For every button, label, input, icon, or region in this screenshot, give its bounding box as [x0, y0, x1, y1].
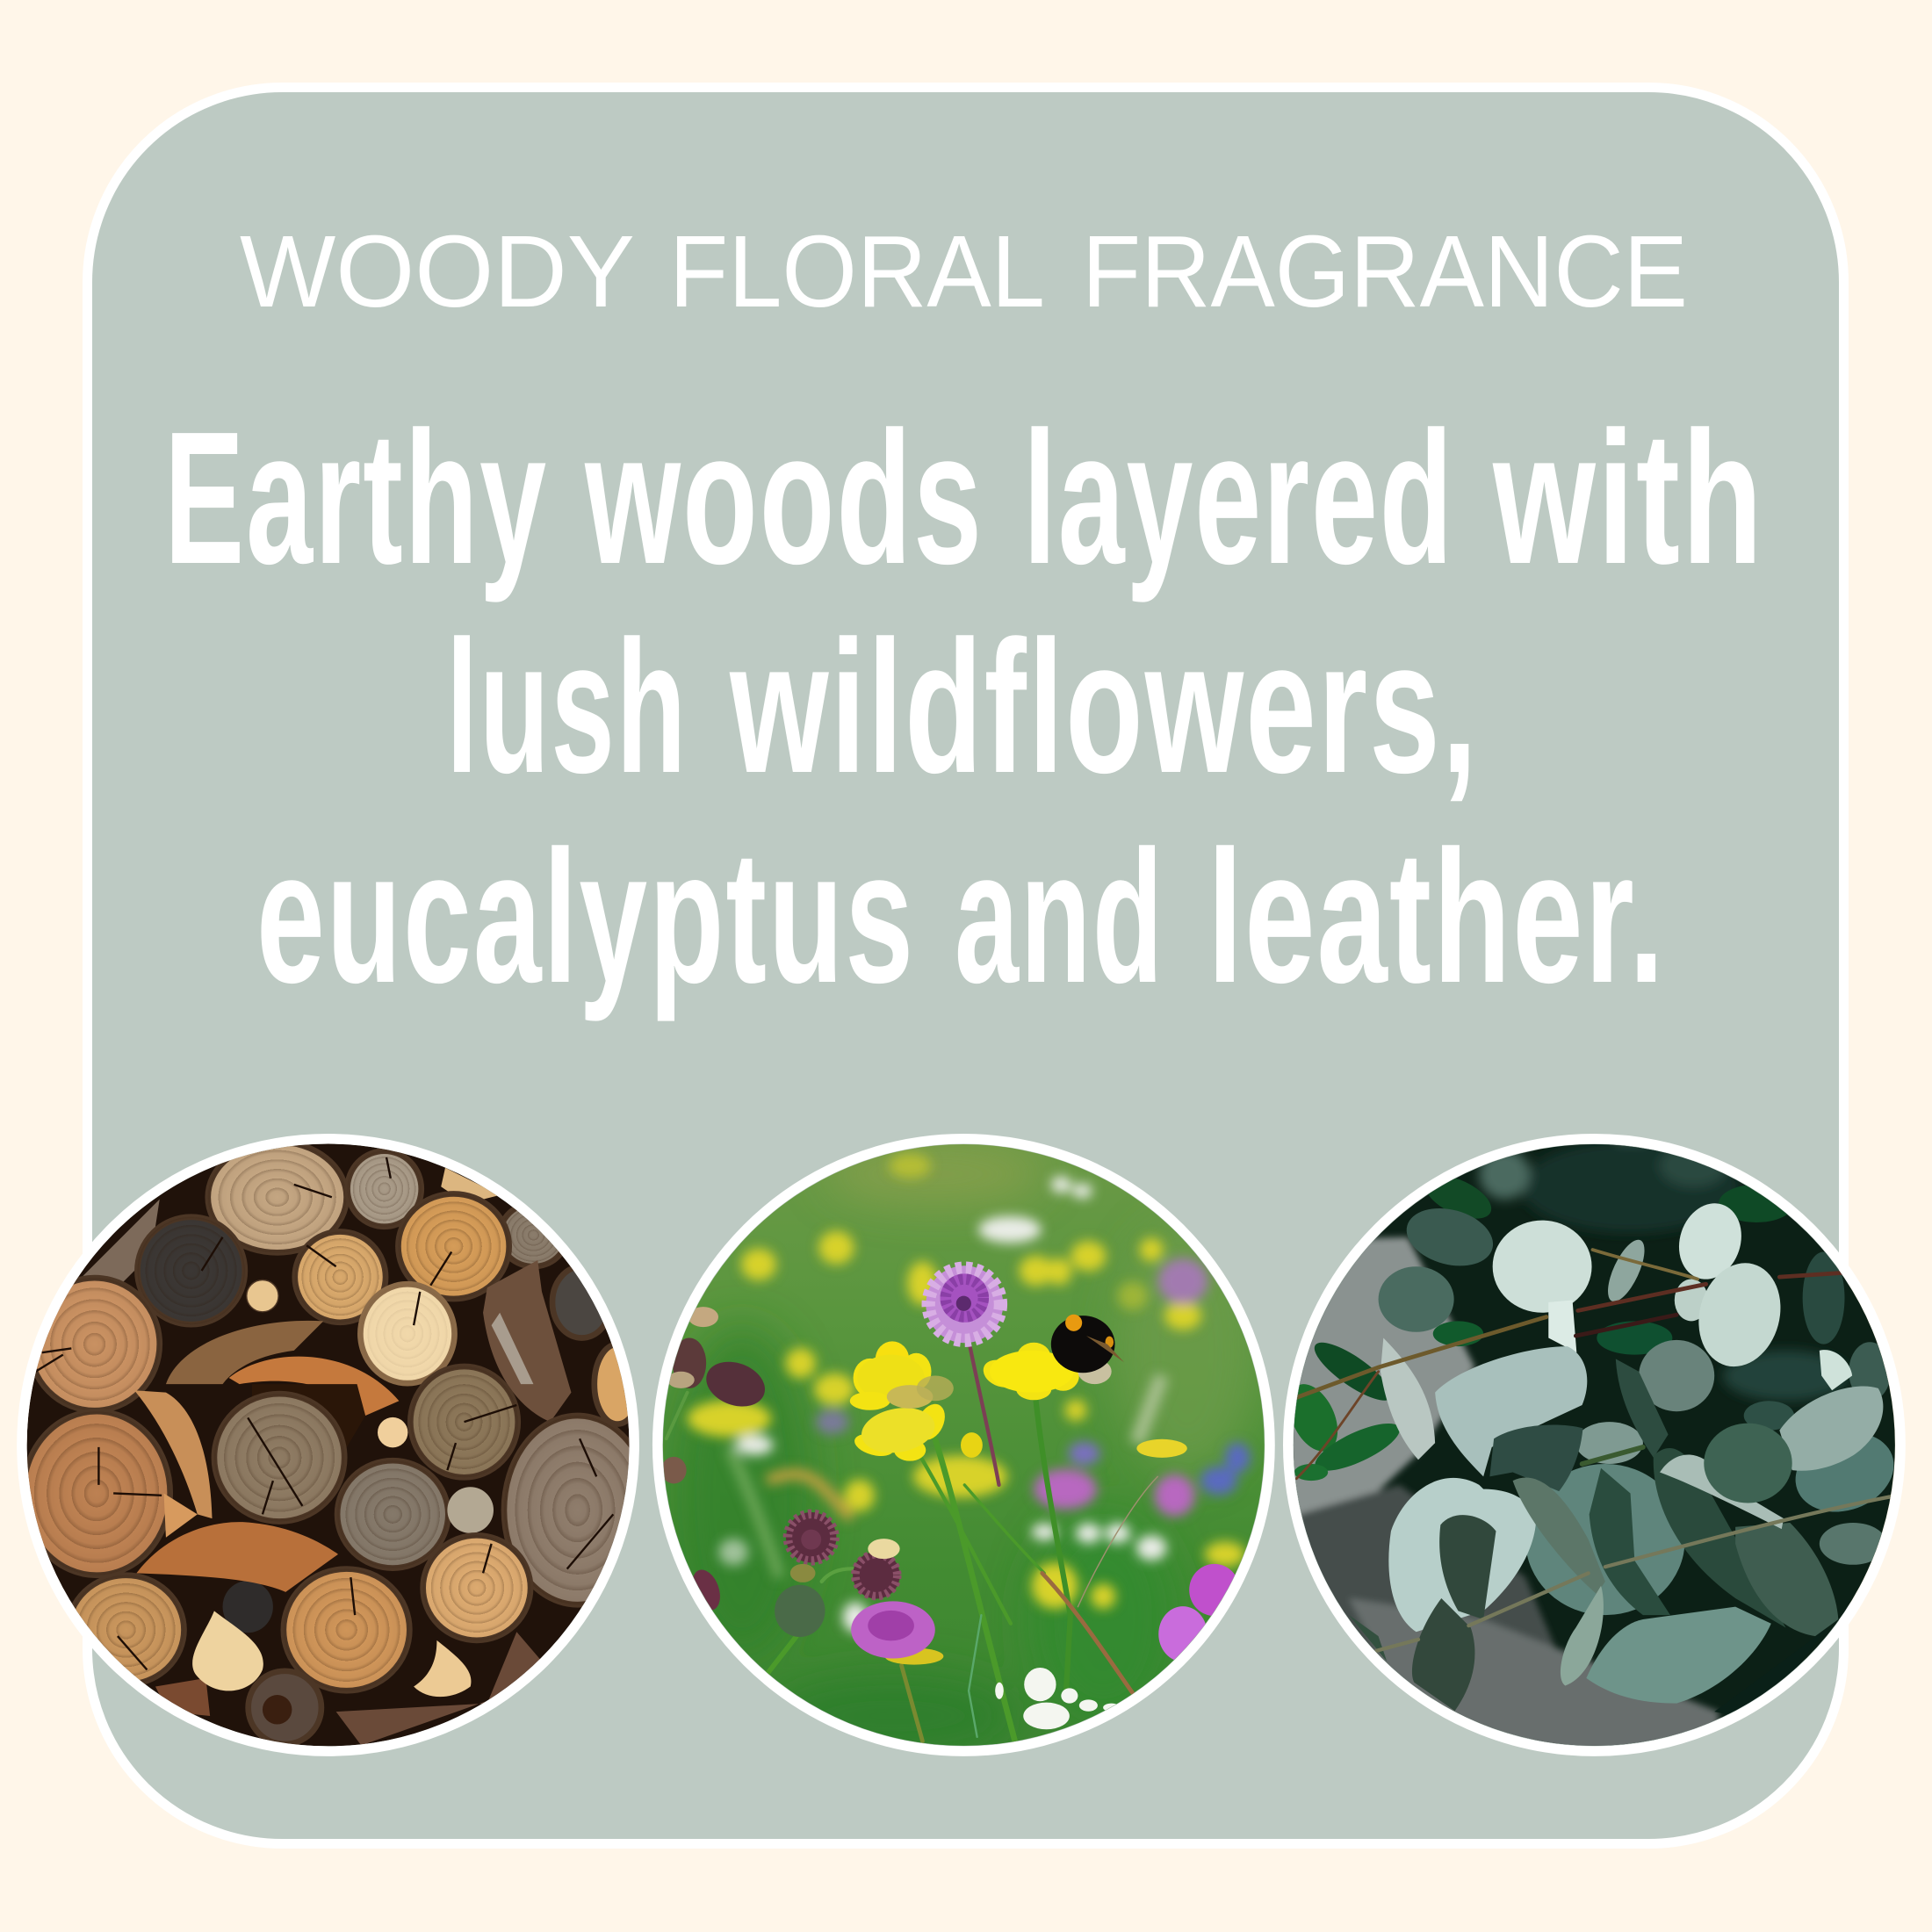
headline: eucalyptus	[256, 811, 915, 1022]
dark foliage	[1479, 1141, 1849, 1401]
headline: wildflowers,	[729, 601, 1479, 812]
allium flower	[926, 1265, 1003, 1343]
headline: lush	[446, 601, 688, 812]
headline: woods	[584, 392, 984, 603]
photo: wildflower meadow	[641, 1115, 1300, 1774]
headline: and	[955, 811, 1164, 1022]
thistles and clover	[661, 1307, 1240, 1662]
grey stone surface	[1273, 1144, 1719, 1774]
buttercups	[850, 1341, 1187, 1665]
headline: leather.	[1208, 811, 1666, 1022]
subheading: WOODY	[240, 214, 635, 328]
pale dewy leaves	[1381, 1195, 1883, 1632]
flower stems	[667, 1330, 1157, 1741]
green leaves	[1280, 1167, 1794, 1481]
blurred background blossoms	[688, 1153, 1251, 1633]
photo: stacked logs	[17, 1134, 639, 1756]
dull back leaves	[1379, 1200, 1905, 1615]
headline	[164, 392, 1764, 1022]
subheading: FLORAL	[669, 214, 1045, 328]
soft colour haze	[670, 1144, 1258, 1758]
bumblebee	[1051, 1315, 1124, 1384]
dark foreground leaves	[1349, 1359, 1838, 1716]
headline: with	[1492, 392, 1764, 603]
headline: Earthy	[164, 392, 548, 603]
white yarrow	[995, 1668, 1120, 1729]
eucalyptus stems	[1296, 1250, 1891, 1651]
subheading: FRAGRANCE	[1082, 214, 1688, 328]
split log arcs	[134, 1321, 399, 1518]
photo: eucalyptus leaves	[1283, 1134, 1906, 1756]
subheading	[240, 214, 1688, 328]
headline: layered	[1023, 392, 1454, 603]
log cracks	[36, 1157, 613, 1669]
